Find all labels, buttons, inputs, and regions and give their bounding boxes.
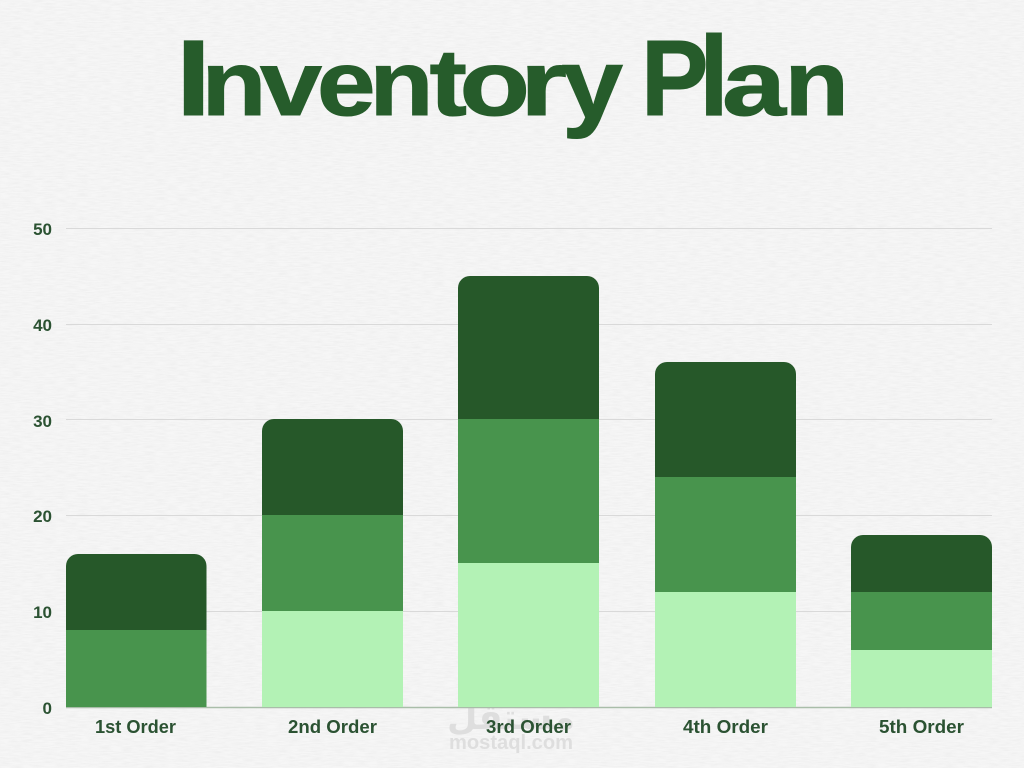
title: n <box>784 33 849 135</box>
y axis labels: 30 <box>33 412 52 431</box>
y axis labels: 50 <box>33 220 52 239</box>
title: e <box>317 33 376 135</box>
bar: 1st Order <box>66 554 206 707</box>
title: t <box>430 30 467 136</box>
title: n <box>202 33 266 135</box>
x axis labels: 3rd Order <box>486 717 571 737</box>
y axis labels: 20 <box>33 507 52 526</box>
title <box>176 13 849 139</box>
x axis labels <box>95 717 964 737</box>
y axis labels: 10 <box>33 603 52 622</box>
title: I <box>176 17 211 138</box>
x axis labels: 2nd Order <box>288 717 377 737</box>
title: v <box>260 33 322 135</box>
x axis labels: 5th Order <box>879 717 964 737</box>
bar: 5th Order <box>851 535 992 707</box>
title: y <box>562 28 623 139</box>
title: n <box>370 33 434 135</box>
y axis labels <box>33 220 52 718</box>
x axis labels: 1st Order <box>95 717 176 737</box>
gridlines <box>66 228 992 612</box>
baseline <box>66 706 992 708</box>
stacked bar chart <box>33 220 992 754</box>
title: P <box>641 17 708 138</box>
title: r <box>520 33 567 135</box>
watermark: مستقل <box>447 698 575 738</box>
title: l <box>699 13 729 139</box>
title: o <box>460 33 530 135</box>
bar: 4th Order <box>655 362 796 707</box>
title: a <box>722 33 787 135</box>
x axis labels: 4th Order <box>683 717 768 737</box>
y axis labels: 0 <box>43 699 52 718</box>
watermark: mostaql.com <box>449 732 573 754</box>
bar: 2nd Order <box>262 419 403 707</box>
bar: 3rd Order <box>458 276 599 707</box>
y axis labels: 40 <box>33 316 52 335</box>
